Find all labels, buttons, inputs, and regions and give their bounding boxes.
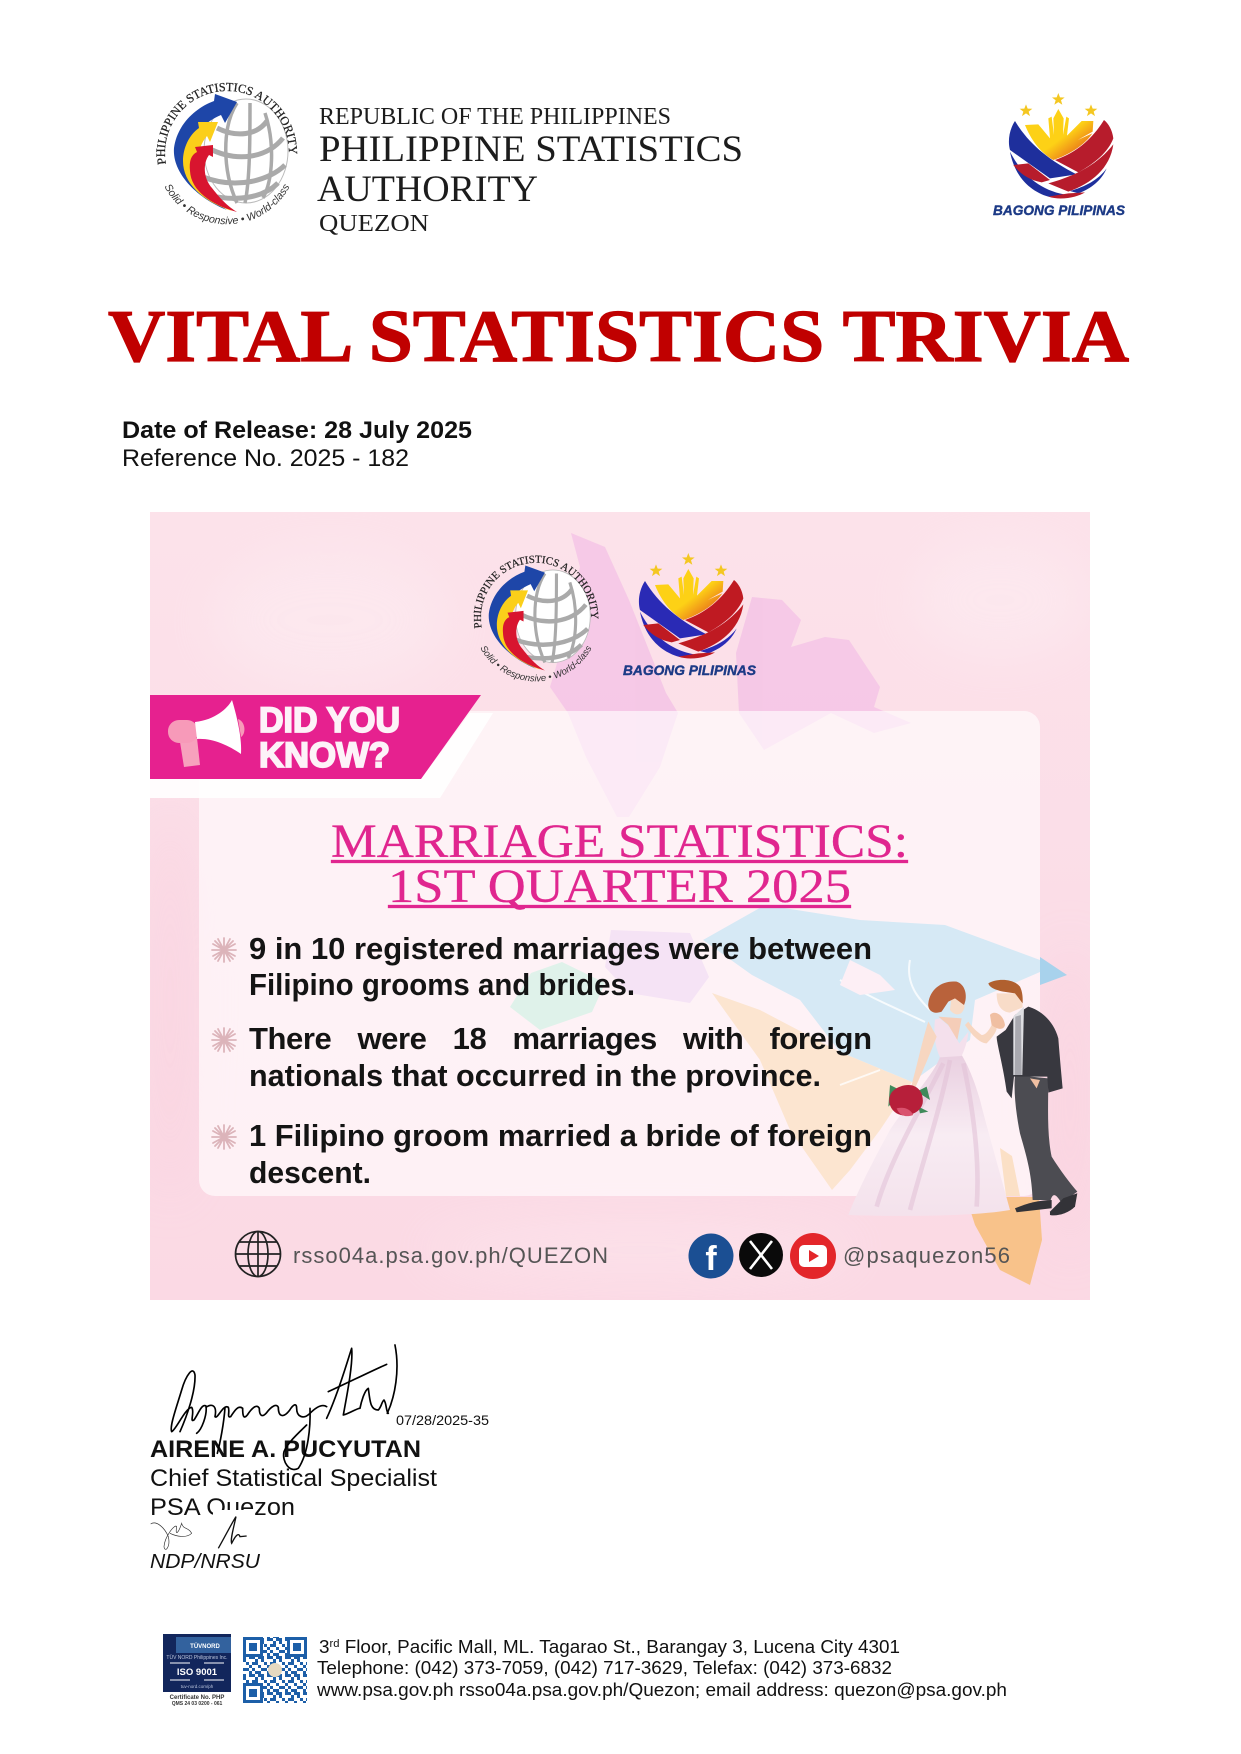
- text: signatory: 07/28/2025-35: [396, 1412, 489, 1428]
- badge: ISO 9001 certification: TÜVNORD: [190, 1643, 220, 1650]
- badge: ISO 9001 certification: QMS 24 03 0200 - 061: [172, 1701, 223, 1707]
- title: VITAL STATISTICS TRIVIA: [108, 296, 1129, 378]
- icon: bullet flower 3: [212, 1125, 236, 1149]
- text: signatory: Chief Statistical Specialist: [150, 1465, 437, 1492]
- release information: Date of Release: 28 July 2025: [122, 417, 472, 444]
- bride: [848, 981, 1010, 1216]
- badge: ISO 9001 certification: [163, 1634, 231, 1707]
- icon: YouTube: [790, 1233, 836, 1279]
- illustration: bride and groom: [848, 980, 1077, 1216]
- badge: ISO 9001 certification: Certificate No. PHP: [170, 1695, 224, 1701]
- list: statistics bullets: 1 Filipino groom married a bride of foreign: [249, 1118, 872, 1153]
- header: agency name: QUEZON: [319, 211, 429, 237]
- header: agency name: [317, 104, 743, 237]
- signature: main: [171, 1345, 397, 1470]
- badge: ISO 9001 certification: ISO 9001: [177, 1667, 218, 1678]
- panel: translucent white card: [199, 711, 1040, 1196]
- icon: facebook: f: [705, 1240, 717, 1278]
- text: social handle: @psaquezon56: [843, 1243, 1010, 1268]
- badge: ISO 9001 certification: tuv-nord.com/ph: [181, 1684, 214, 1689]
- text: did you know: [260, 706, 399, 768]
- map: coloured provinces: [510, 905, 1067, 1285]
- text: signatory: NDP/NRSU: [150, 1551, 261, 1573]
- text: did you know: KNOW?: [259, 736, 390, 775]
- signature: initials 2: [218, 1517, 247, 1548]
- logo: Philippine Statistics Authority seal (small): [474, 555, 598, 682]
- footer: contact text: 3: [319, 1636, 329, 1657]
- icon: bullet flower 1: [212, 938, 236, 962]
- mask: bottom of line: [145, 1515, 305, 1525]
- list: statistics bullets: descent.: [249, 1155, 371, 1190]
- footer: contact text: www.psa.gov.ph rsso04a.psa.gov.ph/Quezon; email address: quezon@psa.gov.ph: [316, 1679, 1007, 1700]
- text: website: rsso04a.psa.gov.ph/QUEZON: [293, 1243, 608, 1268]
- logo: Bagong Pilipinas (small): BAGONG PILIPINAS: [623, 663, 756, 678]
- header: agency name: PHILIPPINE STATISTICS: [319, 129, 743, 170]
- release information: Reference No. 2025 - 182: [122, 445, 409, 472]
- logo: Philippine Statistics Authority seal: PHILIPPINE STATISTICS AUTHORITY: [156, 82, 298, 165]
- text: did you know: DID YOU: [259, 701, 400, 740]
- text: signatory: [150, 1412, 489, 1573]
- white mask over text: [213, 1510, 253, 1518]
- badge: ISO 9001 certification: TÜV NORD Philippines Inc.: [166, 1654, 228, 1661]
- logo: Philippine Statistics Authority seal (small): PHILIPPINE STATISTICS AUTHORITY: [474, 555, 598, 629]
- list: statistics bullets: [212, 931, 872, 1190]
- logo: Bagong Pilipinas (small): [623, 553, 756, 678]
- heading: marriage statistics: 1ST QUARTER 2025: [388, 860, 851, 913]
- signature: initials 1: [151, 1523, 192, 1549]
- badge: did you know: [150, 695, 493, 798]
- heading: marriage statistics: [330, 825, 908, 910]
- logo: Philippine Statistics Authority seal: [156, 82, 298, 224]
- icon: megaphone: [168, 700, 244, 767]
- icon: facebook: [688, 1234, 734, 1278]
- footer: contact text: [316, 1636, 1007, 1700]
- footer: contact text: Telephone: (042) 373-7059, (042) 717-3629, Telefax: (042) 373-6832: [317, 1657, 892, 1678]
- icon: X: [739, 1233, 783, 1277]
- QR code: [243, 1637, 307, 1703]
- text: signatory: PSA Quezon: [150, 1494, 295, 1521]
- map: pink provinces: [550, 533, 911, 817]
- groom: [988, 980, 1077, 1215]
- logo: Philippine Statistics Authority seal: Solid • Responsive • World-class: [165, 184, 289, 224]
- logo: Philippine Statistics Authority seal (small): Solid • Responsive • World-class: [480, 646, 591, 682]
- panel: infographic: [150, 512, 1090, 1300]
- logo: Bagong Pilipinas: [993, 93, 1126, 218]
- icon: bullet flower 2: [212, 1028, 236, 1052]
- list: statistics bullets: There were 18 marriages with foreign: [249, 1021, 872, 1056]
- list: statistics bullets: nationals that occurred in the province.: [249, 1058, 821, 1093]
- logo: Bagong Pilipinas: BAGONG PILIPINAS: [993, 202, 1126, 218]
- list: statistics bullets: Filipino grooms and brides.: [249, 967, 635, 1002]
- text: signatory: AIRENE A. PUCYUTAN: [150, 1436, 421, 1463]
- icon: globe: [236, 1231, 281, 1277]
- list: statistics bullets: 9 in 10 registered marriages were between: [249, 931, 872, 966]
- header: agency name: REPUBLIC OF THE PHILIPPINES: [319, 104, 671, 130]
- release information: [122, 417, 472, 472]
- footer: contact text: Floor, Pacific Mall, ML. Tagarao St., Barangay 3, Lucena City 4301: [339, 1636, 900, 1657]
- footer: contact text: rd: [329, 1638, 339, 1650]
- header: agency name: AUTHORITY: [317, 169, 538, 210]
- heading: marriage statistics: MARRIAGE STATISTICS:: [331, 815, 908, 868]
